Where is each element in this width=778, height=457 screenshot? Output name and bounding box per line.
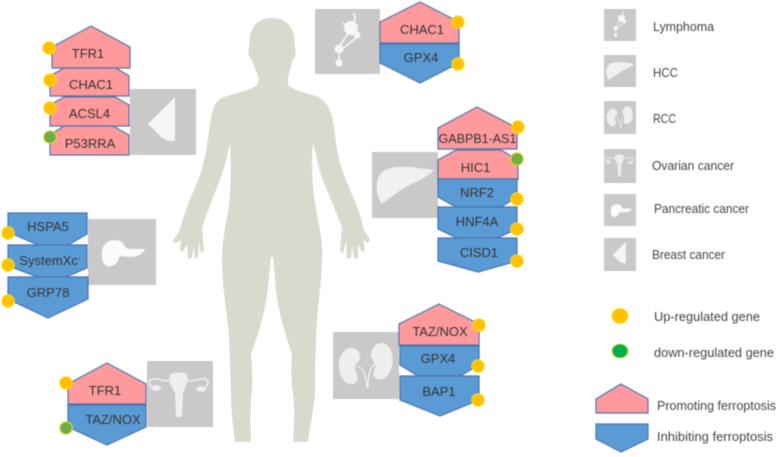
marker: up-regulated GPX4 (452, 58, 464, 70)
marker: up-regulated TFR1 (43, 42, 55, 54)
legend item: HCC (604, 55, 678, 87)
legend item: down-regulated gene: down-regulated gene (654, 345, 774, 360)
panel: hepatocellular carcinoma (372, 107, 524, 272)
marker: down-regulated HIC1 (511, 153, 523, 165)
gene: ACSL4: ACSL4 (69, 106, 110, 121)
organ tile: uterus (147, 361, 213, 427)
panel: ovarian cancer (60, 361, 213, 445)
gene: SystemXc-: - (78, 254, 81, 263)
marker: up-regulated CHAC1 (44, 74, 56, 86)
marker: up-regulated NRF2 (511, 193, 523, 205)
legend item: lymphoma (604, 9, 715, 41)
gene: CISD1: CISD1 (460, 245, 498, 260)
gene: SystemXc-: SystemXc (19, 253, 78, 268)
gene: HSPA5: HSPA5 (27, 219, 69, 234)
legend item: breast cancer (604, 238, 726, 271)
gene: CHAC1 (50, 68, 129, 96)
gene: TFR1 (52, 26, 130, 68)
marker: up-regulated HSPA5 (2, 227, 14, 239)
marker: up-regulated HNF4A (511, 223, 523, 235)
legend: gene regulation and ferroptosis (596, 308, 776, 452)
gene: CHAC1: CHAC1 (69, 77, 113, 92)
marker: up-regulated TFR1 (60, 377, 72, 389)
legend item: lymphoma: Lymphoma (653, 19, 715, 34)
panel: breast cancer (43, 26, 196, 155)
gene: CHAC1: CHAC1 (400, 22, 444, 37)
organ tile: kidneys (333, 332, 399, 399)
marker: up-regulated ACSL4 (44, 102, 56, 114)
gene: BAP1: BAP1 (422, 384, 456, 399)
gene: SystemXc- (8, 245, 87, 277)
gene: TAZ/NOX: TAZ/NOX (412, 324, 468, 339)
legend item: up-regulated gene (612, 308, 760, 324)
legend item: RCC (604, 101, 676, 134)
gene: GABPB1-AS1 (438, 107, 517, 149)
gene: HIC1: HIC1 (461, 160, 490, 175)
marker: up-regulated GRP78 (2, 295, 14, 307)
gene: NRF2: NRF2 (460, 185, 494, 200)
gene: HNF4A: HNF4A (456, 214, 499, 229)
marker: up-regulated GABPB1-AS1 (512, 121, 524, 133)
legend item: pancreatic cancer (604, 194, 750, 226)
marker: up-regulated TAZ/NOX (473, 319, 485, 331)
gene: TAZ/NOX (399, 304, 479, 345)
marker: down-regulated P53RRA (44, 131, 56, 143)
legend item: promoting ferroptosis: Promoting ferroptosis (657, 398, 776, 413)
gene: GRP78: GRP78 (27, 285, 69, 300)
legend item: ovarian cancer: Ovarian cancer (652, 158, 735, 173)
gene: GPX4: GPX4 (421, 351, 455, 366)
human body silhouette (173, 18, 370, 442)
legend item: HCC: HCC (653, 65, 678, 80)
gene: P53RRA: P53RRA (65, 136, 116, 151)
gene: TAZ/NOX (68, 405, 146, 445)
gene: TFR1: TFR1 (89, 383, 121, 398)
gene: HSPA5 (8, 213, 87, 245)
marker: up-regulated CISD1 (511, 255, 523, 267)
organ tile: lymph nodes (315, 9, 380, 74)
gene: GPX4 (400, 346, 479, 376)
panel: pancreatic cancer (2, 213, 156, 318)
gene: BAP1 (400, 376, 479, 416)
gene: HNF4A (438, 207, 517, 238)
legend item: inhibiting ferroptosis (596, 424, 773, 452)
gene: ACSL4 (50, 97, 129, 126)
gene: TFR1: TFR1 (72, 46, 104, 61)
legend item: up-regulated gene: Up-regulated gene (654, 309, 760, 324)
marker: up-regulated GPX4 (472, 360, 484, 372)
gene: GPX4: GPX4 (404, 50, 438, 65)
legend: cancer types (604, 9, 750, 271)
legend item: RCC: RCC (653, 111, 676, 126)
legend item: pancreatic cancer: Pancreatic cancer (654, 201, 750, 216)
gene: GRP78 (8, 277, 88, 318)
legend item: promoting ferroptosis (596, 384, 776, 413)
gene: CISD1 (438, 238, 517, 272)
gene: TAZ/NOX: TAZ/NOX (85, 412, 141, 427)
gene: NRF2 (438, 179, 517, 207)
legend item: ovarian cancer (604, 149, 735, 183)
panel: renal cell carcinoma (333, 304, 485, 416)
organ tile: breast (130, 89, 196, 155)
legend item: breast cancer: Breast cancer (652, 247, 726, 262)
gene: HIC1 (438, 150, 518, 179)
marker: up-regulated SystemXc (2, 259, 14, 271)
gene: CHAC1 (380, 2, 459, 43)
marker: down-regulated TAZ/NOX (60, 422, 72, 434)
panel: lymphoma (315, 2, 464, 83)
gene: P53RRA (50, 126, 129, 155)
gene: GABPB1-AS1: GABPB1-AS1 (438, 131, 516, 146)
marker: up-regulated CHAC1 (452, 16, 464, 28)
legend item: down-regulated gene (612, 344, 774, 360)
organ tile: pancreas (88, 219, 156, 285)
gene: GPX4 (380, 44, 459, 83)
organ tile: liver (372, 152, 438, 218)
legend item: inhibiting ferroptosis: Inhibiting ferroptosis (657, 429, 773, 444)
marker: up-regulated BAP1 (472, 394, 484, 406)
gene: TFR1 (68, 363, 146, 404)
